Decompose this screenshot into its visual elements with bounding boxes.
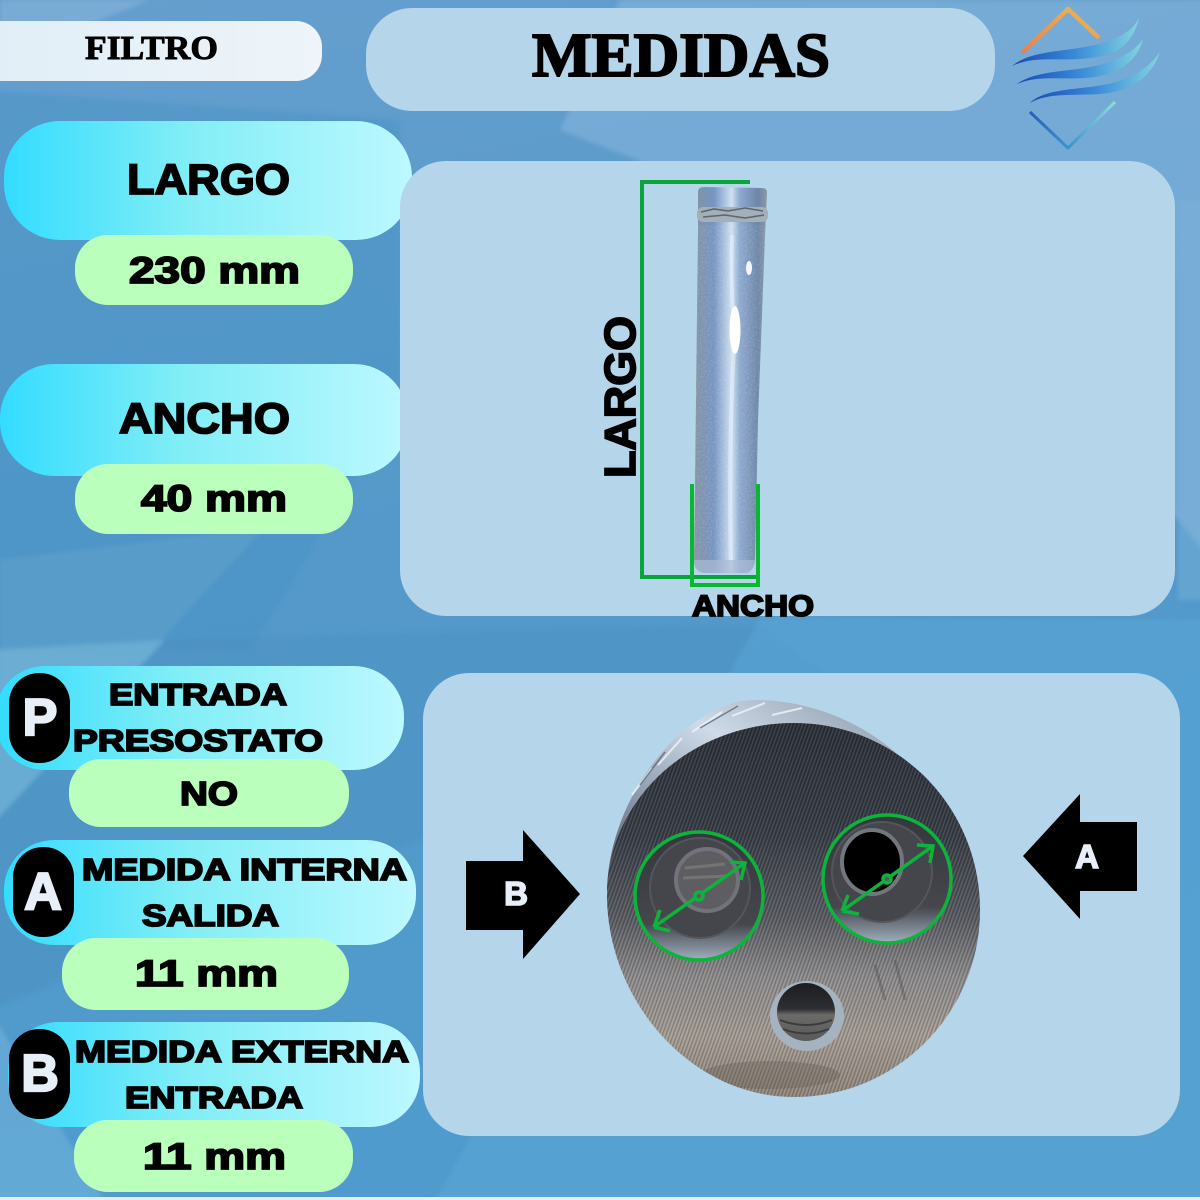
panel: largo	[4, 121, 412, 305]
entrada value: 11 mm	[143, 1136, 286, 1177]
panel: medida externa entrada: MEDIDA EXTERNA	[75, 1034, 409, 1069]
entrada value	[74, 1120, 353, 1192]
filtro label: FILTRO	[85, 30, 218, 67]
panel: medida interna salida: MEDIDA INTERNA	[82, 852, 407, 887]
hole: bottom	[770, 981, 844, 1051]
salida value	[62, 938, 349, 1010]
largo value: 230 mm	[129, 250, 300, 291]
presostato value: NO	[180, 775, 238, 812]
panel: entrada presostato: ENTRADA	[109, 677, 287, 712]
arrow B: B	[504, 875, 528, 912]
largo label: LARGO	[596, 316, 645, 478]
disc	[607, 723, 980, 1097]
badge A	[13, 847, 74, 937]
hole: left	[635, 832, 763, 960]
panel: medida externa entrada	[8, 1022, 420, 1192]
title: medidas: MEDIDAS	[532, 22, 830, 90]
largo value	[75, 235, 353, 305]
arrow A	[1023, 794, 1137, 919]
panel: tube photo	[400, 161, 1175, 623]
weld seam	[697, 207, 768, 222]
presostato value	[69, 759, 349, 827]
panel: entrada presostato: PRESOSTATO	[73, 723, 323, 758]
icon: logo	[1012, 9, 1160, 148]
badge P: P	[23, 689, 57, 747]
badge B: B	[21, 1045, 59, 1103]
ancho bracket	[692, 484, 758, 585]
panel: ancho	[0, 364, 408, 534]
badge A: A	[24, 863, 62, 921]
ancho label: ANCHO	[692, 590, 814, 623]
panel: largo: LARGO	[127, 156, 290, 204]
arrow B	[466, 830, 580, 959]
panel: medida interna salida	[4, 840, 416, 1010]
ancho value: 40 mm	[141, 478, 287, 519]
panel: medida externa entrada: ENTRADA	[125, 1080, 303, 1115]
panel: ancho: ANCHO	[119, 395, 290, 443]
panel: entrada presostato	[0, 666, 404, 827]
filtro label	[0, 21, 322, 81]
tube	[690, 185, 770, 577]
title: medidas	[366, 8, 995, 111]
arrow A: A	[1075, 838, 1099, 875]
badge B	[9, 1029, 70, 1119]
salida value: 11 mm	[135, 953, 278, 994]
badge P	[9, 673, 70, 763]
weld	[607, 700, 895, 890]
ancho value	[75, 464, 353, 534]
panel: medida interna salida: SALIDA	[142, 898, 279, 933]
largo bracket	[642, 182, 757, 577]
green measure: right	[823, 815, 951, 943]
hole: right	[823, 815, 951, 943]
panel: disc photo	[423, 673, 1180, 1136]
green measure: left	[635, 832, 763, 960]
